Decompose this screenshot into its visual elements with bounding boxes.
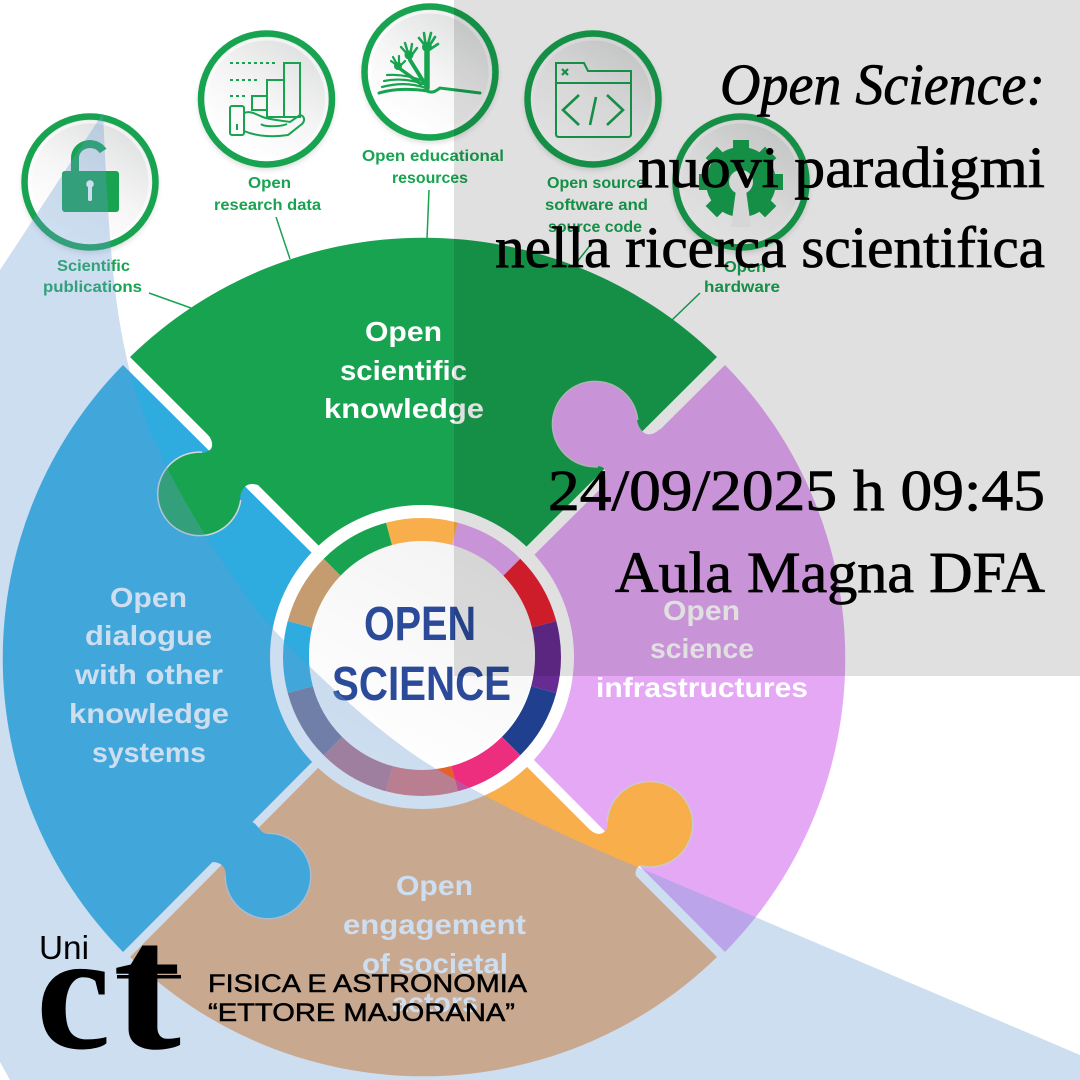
label: open hardware [704, 259, 780, 296]
icon: open lock, scientific publications [22, 116, 158, 253]
label: open dialogue: dialogue [85, 620, 212, 651]
leader line: open educational resources [427, 190, 429, 239]
piece: open dialogue (blue) [3, 365, 330, 952]
label: open hardware: Open [724, 259, 766, 276]
date and venue [548, 458, 1045, 605]
knob: green into blue [158, 415, 278, 535]
hub text: OPEN [364, 598, 476, 651]
piece: open scientific knowledge (green) [130, 238, 717, 557]
label: open science infrastructures: infrastructures [596, 672, 808, 703]
label: open engagement of societal actors [343, 870, 526, 1018]
label: open hardware: hardware [704, 279, 780, 296]
department name [208, 970, 527, 1027]
label: open dialogue: systems [92, 737, 206, 768]
logo: UniCT [36, 887, 181, 1080]
ring segment: exposed orange sliver [436, 766, 455, 780]
label: open dialogue: Open [110, 582, 187, 613]
label: open science infrastructures [596, 595, 808, 703]
label: open source software and source code: software and [545, 197, 648, 214]
title [495, 52, 1045, 280]
knob: purple into green [553, 382, 680, 506]
background shape: translucent grey panel [454, 0, 1080, 676]
label: scientific publications: publications [43, 279, 142, 296]
label: open scientific knowledge [324, 316, 484, 424]
label: open dialogue: with other [74, 659, 223, 690]
label: open engagement of societal actors: actors [392, 987, 478, 1018]
icon: source code window [525, 34, 661, 170]
date and venue: 24/09/2025 h 09:45 [548, 458, 1045, 523]
label: open source software and source code: Open source [547, 175, 645, 192]
date and venue: Aula Magna DFA [615, 540, 1045, 605]
logo: UniCT: c [36, 899, 111, 1080]
label: open educational resources: resources [392, 170, 468, 187]
leader line: open research data [276, 217, 290, 259]
icon: open hardware gear [673, 116, 809, 253]
hub disc [309, 541, 535, 767]
knob: orange into purple [590, 780, 694, 876]
label: open engagement of societal actors: Open [396, 870, 473, 901]
central hub [270, 505, 574, 809]
leader line: open hardware [672, 293, 700, 320]
icon: open book with hands [362, 6, 498, 143]
label: open research data: research data [214, 197, 321, 214]
label: open research data [214, 175, 321, 214]
label: open dialogue [69, 582, 229, 768]
knob: blue into orange [192, 802, 310, 918]
piece: open engagement (orange) [130, 756, 717, 1076]
title: nuovi paradigmi [638, 135, 1045, 200]
department name: FISICA E ASTRONOMIA [208, 970, 527, 998]
label: open science infrastructures: science [650, 633, 754, 664]
hub text [332, 598, 511, 711]
puzzle wheel [3, 238, 845, 1076]
icon: research data bars on hand [198, 34, 334, 170]
label: open scientific knowledge: scientific [340, 355, 467, 386]
label: open research data: Open [248, 175, 291, 192]
title: nella ricerca scientifica [495, 215, 1045, 280]
label: open source software and source code: source code [548, 219, 642, 236]
label: open science infrastructures: Open [663, 595, 740, 626]
label: open dialogue: knowledge [69, 698, 229, 729]
leader line: open source software [577, 243, 592, 262]
colour ring [296, 531, 548, 783]
leader line: scientific publications [149, 293, 191, 308]
white gap ring [270, 505, 574, 809]
label: scientific publications [43, 258, 142, 296]
label: open scientific knowledge: Open [365, 316, 442, 347]
title: Open Science: [720, 52, 1045, 117]
hub text: SCIENCE [332, 658, 511, 711]
label: open scientific knowledge: knowledge [324, 393, 484, 424]
logo: UniCT: Uni [39, 929, 89, 966]
label: scientific publications: Scientific [57, 258, 130, 275]
label: open source software and source code [545, 175, 648, 236]
piece labels [69, 316, 808, 1018]
label: open engagement of societal actors: engagement [343, 909, 526, 940]
label: open educational resources: Open educational [362, 148, 504, 165]
piece: open science infrastructures (purple) [525, 365, 845, 952]
department name: “ETTORE MAJORANA” [208, 999, 515, 1027]
label: open educational resources [362, 148, 504, 187]
label: open engagement of societal actors: of societal [362, 948, 508, 979]
